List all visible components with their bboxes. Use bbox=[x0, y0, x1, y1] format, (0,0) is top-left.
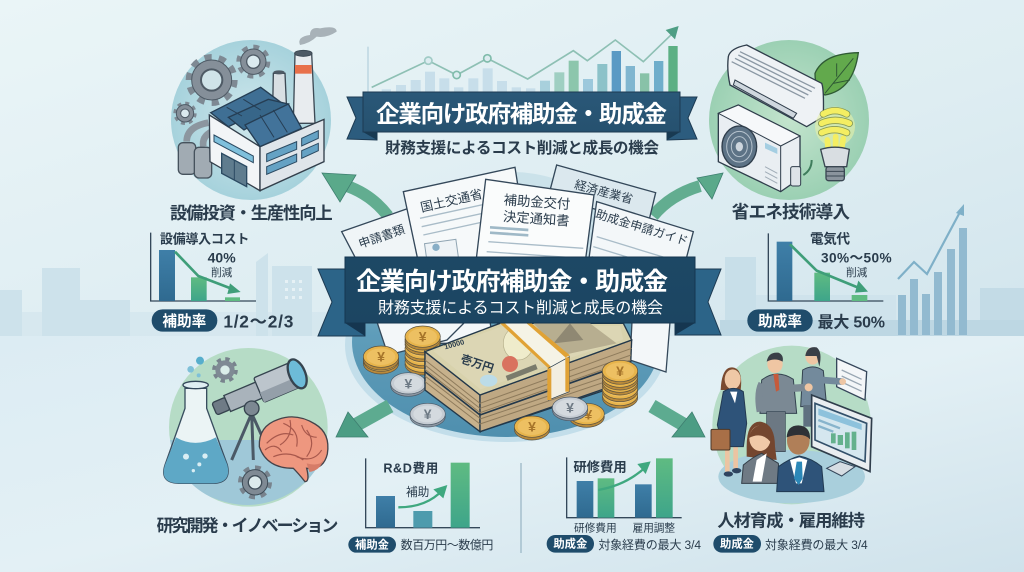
document: land ministry bbox=[403, 167, 530, 270]
person: standing man center bbox=[759, 353, 813, 452]
coin: silver left: ¥ bbox=[404, 375, 412, 391]
banknote bundle: 壱万円 bbox=[459, 352, 496, 375]
panel: equipment investment bbox=[151, 27, 337, 332]
coin: gold center: ¥ bbox=[528, 419, 536, 435]
chart: training cost: 雇用調整 bbox=[633, 522, 675, 535]
document: economy ministry: 経済産業省 bbox=[573, 178, 634, 207]
chart: electricity cost reduction: 削減 bbox=[846, 266, 868, 279]
chart: training cost: 研修費用 bbox=[573, 459, 627, 475]
chart: electricity cost reduction bbox=[768, 230, 892, 301]
chart: equipment cost reduction: 削減 bbox=[211, 266, 233, 279]
person: standing woman right bbox=[801, 347, 846, 427]
coin: gold right bbox=[569, 403, 604, 427]
pill: grant rate: 助成率 bbox=[758, 312, 802, 330]
pill: training grant: 助成金 bbox=[553, 537, 588, 551]
chart: training cost bbox=[567, 457, 682, 535]
document: grant decision notice: 補助金交付 bbox=[503, 192, 571, 212]
document: grant application guide: 助成金申請ガイド bbox=[594, 207, 690, 248]
heading: research and development: 研究開発・イノベーション bbox=[157, 516, 338, 535]
chart: electricity cost reduction: 30%〜50% bbox=[821, 250, 892, 265]
document: right sheet below banner bbox=[630, 322, 670, 372]
document: application forms bbox=[342, 208, 430, 270]
person: seated man bbox=[777, 425, 824, 492]
document: grant decision notice bbox=[475, 179, 594, 277]
icon: air conditioner, leaf and bulb bbox=[709, 40, 869, 200]
central dish: back arc bbox=[400, 172, 624, 352]
document: lower left sheet bbox=[372, 257, 493, 343]
chart: equipment cost reduction bbox=[151, 231, 256, 301]
chart: electricity cost reduction: 電気代 bbox=[810, 230, 850, 246]
document: land ministry: 国土交通省 bbox=[419, 187, 484, 215]
skyline: left city silhouette bbox=[0, 253, 340, 336]
pill: training grant bbox=[547, 535, 594, 553]
coin: gold left bbox=[363, 346, 399, 374]
arrow: to human resources bbox=[652, 406, 705, 437]
pill: subsidy amount: 補助金 bbox=[355, 538, 390, 552]
value: employment grant: 対象経費の最大 3/4 bbox=[765, 537, 868, 552]
heading: equipment investment: 設備投資・生産性向上 bbox=[170, 203, 333, 223]
value: subsidy rate: 1/2〜2/3 bbox=[223, 311, 294, 331]
pill: subsidy rate bbox=[152, 309, 217, 332]
coin: silver right bbox=[552, 397, 588, 421]
document: left sheet below banner bbox=[377, 322, 465, 355]
document: application forms: 申請書類 bbox=[357, 222, 407, 251]
coins: left stack: ¥ bbox=[419, 329, 427, 345]
coin: silver lower left bbox=[410, 403, 445, 427]
banner: central title bbox=[318, 257, 721, 336]
coin: silver left bbox=[391, 373, 426, 396]
pill: grant rate bbox=[747, 309, 813, 332]
banknote bundle bbox=[425, 323, 632, 432]
chart: R&D cost: R&D費用 bbox=[383, 461, 438, 476]
coins: left stack bbox=[405, 326, 440, 375]
heading: energy saving technology: 省エネ技術導入 bbox=[732, 201, 850, 222]
documents: applications and notices bbox=[342, 165, 693, 343]
banner: top title bbox=[347, 92, 697, 140]
banner: top title: 企業向け政府補助金・助成金 bbox=[376, 101, 668, 127]
coins: right stack: ¥ bbox=[616, 363, 624, 379]
value: grant rate: 最大 50% bbox=[818, 313, 885, 331]
skyline: right city and rising bars bbox=[720, 204, 1024, 336]
icon: business people and monitor bbox=[711, 346, 872, 504]
icon: flask, telescope and brain bbox=[164, 348, 328, 507]
banner: central title: 財務支援によるコスト削減と成長の機会 bbox=[378, 299, 663, 317]
document: economy ministry bbox=[548, 165, 656, 223]
illustration: yen bundle and coins bbox=[363, 323, 638, 440]
person: standing woman left bbox=[711, 367, 747, 477]
pill: employment grant bbox=[713, 535, 761, 553]
icon: computer monitor bbox=[812, 395, 872, 476]
coin: silver right: ¥ bbox=[566, 400, 574, 416]
panel: research and development bbox=[157, 348, 493, 553]
document: grant decision notice: 決定通知書 bbox=[503, 208, 570, 229]
chart: R&D cost bbox=[366, 458, 480, 528]
pill: subsidy amount bbox=[348, 537, 396, 553]
document: grant application guide bbox=[583, 202, 693, 327]
heading: human resources: 人材育成・雇用維持 bbox=[717, 510, 865, 530]
coins: right stack bbox=[602, 360, 638, 408]
subtitle: top: 財務支援によるコスト削減と成長の機会 bbox=[385, 138, 659, 157]
banner: central title: 企業向け政府補助金・助成金 bbox=[356, 268, 668, 296]
panel: energy saving technology bbox=[709, 40, 892, 332]
central dish: outer ring bbox=[345, 248, 667, 442]
coin: gold right: ¥ bbox=[584, 406, 592, 422]
chart: background rising bar and line chart bbox=[368, 26, 679, 96]
icon: factory with gears bbox=[171, 27, 337, 200]
arrow: to energy saving bbox=[653, 173, 723, 216]
value: training grant: 対象経費の最大 3/4 bbox=[598, 537, 701, 552]
arrow: to equipment investment bbox=[322, 173, 388, 216]
panel: human resources bbox=[547, 346, 872, 553]
pill: subsidy rate: 補助率 bbox=[162, 312, 207, 330]
person: seated woman bbox=[742, 422, 780, 483]
chart: R&D cost: 補助 bbox=[406, 485, 429, 499]
arrow: to research and development bbox=[336, 406, 390, 437]
chart: equipment cost reduction: 40% bbox=[208, 249, 236, 265]
central dish: inner blue plate bbox=[352, 247, 660, 437]
pill: employment grant: 助成金 bbox=[720, 537, 755, 551]
coin: gold center bbox=[514, 416, 550, 440]
coin: silver lower left: ¥ bbox=[424, 406, 432, 422]
chart: training cost: 研修費用 bbox=[574, 522, 617, 535]
value: subsidy amount: 数百万円〜数億円 bbox=[401, 537, 493, 552]
chart: equipment cost reduction: 設備導入コスト bbox=[160, 231, 249, 246]
coin: gold left: ¥ bbox=[377, 349, 385, 365]
banknote bundle: 10000 bbox=[443, 337, 465, 351]
